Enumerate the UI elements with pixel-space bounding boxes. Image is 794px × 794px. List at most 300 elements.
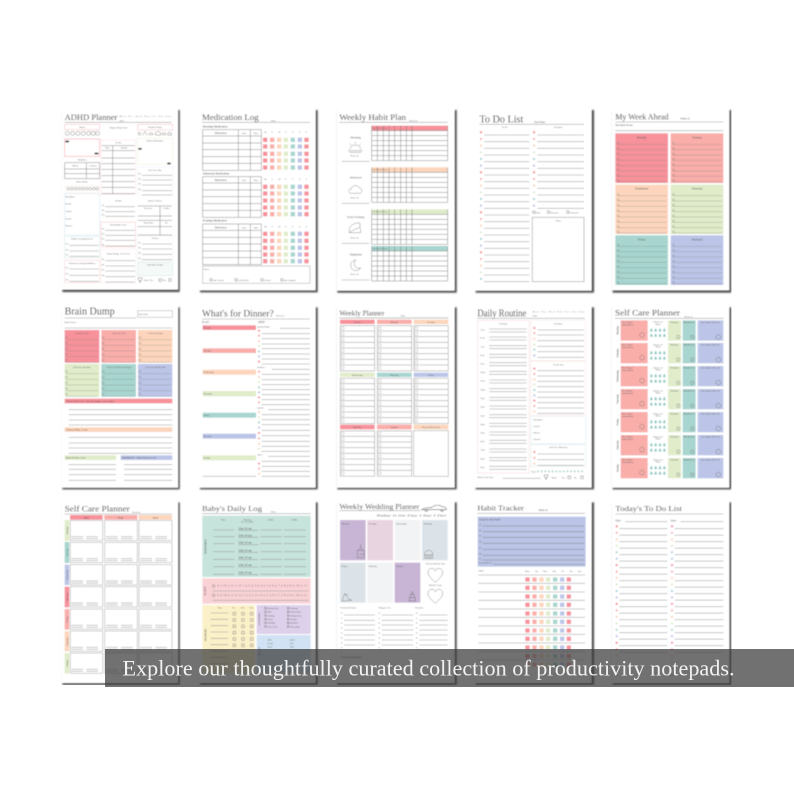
to do list bbox=[480, 131, 529, 282]
evening table: Medication bbox=[215, 226, 227, 229]
health block: weary bbox=[267, 642, 274, 645]
evening table: Evening Medication bbox=[203, 219, 227, 223]
Friday tile: Friday bbox=[638, 237, 646, 241]
priorities list: Priorities bbox=[415, 606, 424, 609]
self care moments bbox=[531, 445, 586, 466]
notes box bbox=[203, 266, 310, 283]
Sunday row: One thing I bbox=[622, 459, 633, 462]
panel: To Do List page: Priorities bbox=[554, 126, 563, 129]
self care plan: Self Care Plan bbox=[148, 169, 163, 172]
meals box: Dinner: bbox=[65, 225, 73, 228]
evening checks: T bbox=[285, 226, 287, 229]
diapers block: Time bbox=[218, 606, 222, 609]
call tile: I Need to Call bbox=[75, 332, 89, 335]
morning table: Time bbox=[254, 132, 258, 135]
schedule box: 7 pm bbox=[480, 449, 485, 452]
Tuesday tile: Tuesday bbox=[692, 136, 703, 140]
health block bbox=[257, 635, 311, 673]
Wednesday tile: Wednesday bbox=[396, 522, 408, 525]
to do box bbox=[531, 361, 586, 415]
panel: Daily Routine page bbox=[473, 305, 594, 489]
morning checks: T bbox=[285, 131, 287, 134]
morning table bbox=[203, 125, 261, 170]
Wednesday row: affirmations bbox=[622, 369, 633, 372]
Thursday tile: Thursday bbox=[691, 187, 703, 191]
Friday row: affirmations bbox=[622, 415, 633, 418]
self care moments: Self Care Moments bbox=[549, 446, 567, 449]
schedule box: 12pm bbox=[480, 388, 485, 391]
Friday row: Workout bbox=[670, 413, 679, 416]
title: What's for Dinner? bbox=[202, 309, 274, 319]
Thursday row: One thing I did well bbox=[701, 390, 720, 393]
activities block: screen free bbox=[267, 625, 277, 628]
fitness tracker: Steps Run bbox=[144, 222, 154, 225]
health list: 01. bbox=[102, 204, 105, 207]
water drops: H₂O bbox=[532, 470, 536, 473]
word of the day and rating bbox=[477, 475, 583, 480]
panel: Weekly Wedding Planner page bbox=[337, 500, 457, 685]
first row grids bbox=[340, 326, 448, 371]
habit grid morning: M T W T F S S bbox=[373, 127, 388, 130]
Tuesday row: Water bbox=[655, 346, 661, 349]
health block: calm bbox=[267, 638, 272, 641]
afternoon table: Dose bbox=[242, 179, 247, 182]
Monday tile: Monday bbox=[341, 522, 350, 525]
start date box: Start Date: bbox=[139, 313, 149, 316]
Friday row: Glasses of bbox=[653, 412, 663, 415]
activities block: pedialist bbox=[290, 622, 298, 625]
sleep block bbox=[202, 578, 311, 604]
notes box bbox=[532, 217, 584, 282]
schedule box: 5 pm bbox=[480, 432, 485, 435]
panel: Weekly Planner page bbox=[337, 305, 457, 489]
panel: Baby's Daily Log page: Date: bbox=[271, 511, 276, 514]
meals box: Snack: bbox=[65, 217, 72, 220]
activities block: reading bbox=[267, 614, 275, 617]
weekday row: Mon Tue Wed Thu Fri Sat Sun bbox=[119, 115, 172, 118]
title: Today's To Do List bbox=[615, 504, 682, 513]
day bars: Friday bbox=[203, 414, 210, 417]
title: Brain Dump bbox=[65, 306, 115, 318]
third row headers: Notes & Meal Prep bbox=[422, 426, 441, 429]
schedule box: 11am bbox=[480, 380, 485, 383]
fitness tracker: Fitness Tracker bbox=[148, 200, 162, 203]
feedings block: 20m 30 am bbox=[238, 541, 252, 545]
sleep block: 9 a 10 a 11 a 12 1 p 2 p 3 p 4 p 5 p 6 p 7 p 8 p 9 p 10 p 11 bbox=[217, 585, 307, 588]
Sunday row: One thing I did well bbox=[701, 459, 720, 462]
Sunday row: Water bbox=[655, 461, 661, 464]
habit grid morning bbox=[372, 126, 448, 161]
afternoon checks: W bbox=[278, 178, 281, 181]
first row headers: Monday bbox=[390, 321, 399, 324]
second row headers bbox=[340, 373, 448, 377]
Monday row: One thing I bbox=[622, 321, 633, 324]
feedings block: 20m 30 am bbox=[238, 526, 252, 530]
to do box: To Do List bbox=[553, 363, 564, 366]
schedule box: 9 am bbox=[480, 362, 485, 365]
Tuesday row: One thing I did well bbox=[701, 344, 720, 347]
activities block: sitting focus bbox=[290, 614, 302, 617]
morning table: Dose bbox=[242, 132, 247, 135]
main focus bbox=[615, 124, 723, 131]
fitness tracker: Cardio bbox=[163, 207, 170, 210]
panel: To Do List page: To Do bbox=[502, 126, 508, 129]
morning checks: W bbox=[278, 131, 281, 134]
afternoon checks: M bbox=[264, 178, 266, 181]
habit header: Wed bbox=[543, 570, 548, 573]
evening table: Dose bbox=[242, 226, 247, 229]
diapers block bbox=[202, 605, 255, 673]
third row headers: Sunday bbox=[391, 426, 399, 429]
panel: To Do List page bbox=[473, 107, 594, 293]
date left: Date: bbox=[615, 519, 621, 522]
health block: sad bbox=[290, 642, 294, 645]
nutrition table bbox=[65, 159, 100, 179]
priorities list bbox=[533, 131, 584, 208]
panel: Weekly Habit Plan page: Week of: bbox=[409, 119, 418, 122]
schedule box: Schedule bbox=[499, 322, 508, 325]
Tuesday row: Mindful Eat bbox=[683, 344, 695, 347]
call tile bbox=[65, 330, 99, 363]
date right: Date: bbox=[671, 519, 677, 522]
date left bbox=[615, 519, 667, 522]
schedule box: 2 pm bbox=[480, 406, 485, 409]
schedule box: 7 am bbox=[480, 345, 485, 348]
feedings block: Time bbox=[221, 518, 226, 521]
habit grid afternoon bbox=[372, 167, 448, 202]
meals box: Snacks: bbox=[533, 438, 541, 441]
Wednesday row: Glasses of bbox=[653, 366, 663, 369]
script tagline: Today is the Day I Say I Do! bbox=[376, 514, 447, 518]
priorities box bbox=[531, 320, 586, 361]
research section: I Want to Research, Look, Investigate, Learn About bbox=[66, 400, 114, 403]
diapers block: Dry bbox=[250, 606, 254, 609]
Friday row: Friday bbox=[617, 418, 620, 425]
panel: Self Care Planner weekly page bbox=[612, 305, 731, 489]
morning checks: S bbox=[299, 131, 301, 134]
daily affirmation: Daily Affirmation bbox=[147, 140, 164, 143]
activities block: bath bbox=[267, 611, 272, 614]
main focus bbox=[65, 321, 172, 328]
column headers: Spirit bbox=[153, 516, 158, 519]
status checkboxes bbox=[533, 211, 579, 215]
right list bbox=[671, 525, 723, 676]
Sunday row: Sunday bbox=[617, 463, 620, 472]
evening table bbox=[203, 219, 261, 265]
afternoon checks bbox=[263, 178, 309, 216]
Monday row bbox=[65, 520, 172, 541]
mood block bbox=[65, 124, 100, 135]
second row grids bbox=[340, 378, 448, 424]
day bars: Thursday bbox=[203, 393, 213, 396]
meals box: Lunch: bbox=[533, 425, 540, 428]
Thursday row: Glasses of bbox=[653, 389, 663, 392]
panel: Medication Log page bbox=[199, 107, 318, 292]
Sunday row bbox=[65, 653, 172, 673]
Tuesday row bbox=[617, 343, 723, 363]
Saturday row: Saturday bbox=[617, 440, 620, 450]
feedings block: FEEDINGS bbox=[203, 539, 207, 554]
shopping list: other: bbox=[257, 453, 263, 456]
water drops bbox=[532, 470, 583, 473]
morning checks: M bbox=[264, 131, 266, 134]
morning checks bbox=[263, 131, 309, 170]
Wednesday row bbox=[617, 366, 723, 386]
morning label and icon: Morning bbox=[350, 135, 361, 139]
remarkable notes list: 03. bbox=[102, 238, 105, 241]
schedule dump: Scheduler Dump bbox=[147, 264, 164, 267]
Friday tile bbox=[615, 235, 668, 285]
remarkable notes list: 01. bbox=[102, 228, 105, 231]
habit header: Sat bbox=[570, 570, 573, 573]
sleep block: 9 p 10 p 11 p 12 1 a 2 a 3 a 4 a 5 a 6 a 7 a 8 a 9 a 10 a 11 bbox=[217, 594, 307, 597]
feedings block bbox=[202, 516, 311, 577]
activities block: walking bbox=[267, 622, 276, 625]
Thursday tile bbox=[422, 520, 448, 560]
schedule box: 8 pm bbox=[480, 457, 485, 460]
nighttime label and icon: Done AL bbox=[350, 273, 360, 276]
Sunday row: Mindful Eat bbox=[683, 459, 695, 462]
Wednesday row: Wednesday bbox=[66, 569, 69, 580]
start date box bbox=[138, 311, 172, 317]
brain dump list: 02. bbox=[102, 263, 105, 266]
title: Daily Routine bbox=[477, 308, 527, 319]
Saturday tile bbox=[367, 563, 393, 603]
planner pages collection bbox=[61, 107, 731, 685]
feedings block: Nursing bbox=[244, 518, 252, 521]
panel: ADHD Planner page bbox=[61, 107, 180, 292]
panel: What's for Dinner page: SHOP bbox=[258, 321, 265, 324]
evening checks: W bbox=[278, 226, 281, 229]
Sunday tile: Sunday bbox=[396, 565, 404, 568]
grateful list: 01. bbox=[66, 243, 69, 246]
evening table: Time bbox=[254, 226, 258, 229]
Friday tile: Friday bbox=[341, 565, 348, 568]
email tile: I Need to Email bbox=[148, 332, 163, 335]
to dos: To Dos bbox=[152, 237, 158, 240]
Wednesday tile bbox=[395, 520, 420, 560]
Wednesday row: One thing I bbox=[622, 367, 633, 370]
feedings block: Solids bbox=[291, 518, 297, 521]
afternoon checks: T bbox=[285, 178, 287, 181]
Friday tile bbox=[340, 563, 366, 603]
brain dump list: Brain Dump - Get it out bbox=[107, 252, 130, 255]
countdown hearts: Weeks Until the Day bbox=[426, 563, 446, 566]
panel: My Week Ahead page: Week of: bbox=[680, 118, 690, 121]
habit grid evening bbox=[372, 209, 448, 244]
schedule tile: I Need to Schedule bbox=[73, 366, 91, 369]
goals box: 02 bbox=[479, 529, 482, 532]
title: To Do List bbox=[479, 114, 524, 125]
evening checks bbox=[263, 226, 309, 263]
habit header: Tue bbox=[535, 570, 538, 573]
feedings block: 20m 30 pm bbox=[238, 533, 253, 537]
rating row: Rate? Yes bbox=[144, 279, 153, 282]
schedule box: 9 pm bbox=[480, 466, 485, 469]
main focus: My Main Focus: bbox=[615, 124, 633, 127]
Monday tile bbox=[340, 520, 366, 560]
schedule tile bbox=[65, 364, 99, 397]
self care plan bbox=[138, 167, 173, 195]
self care plan: 02. bbox=[138, 177, 142, 180]
title: Self Care Planner bbox=[65, 505, 130, 514]
afternoon table: Time bbox=[254, 179, 258, 182]
Wednesday row: One thing I did well bbox=[701, 367, 720, 370]
to dos: 03. bbox=[138, 252, 142, 255]
habit header: Fri bbox=[561, 570, 564, 573]
activities block: sit play bbox=[290, 618, 298, 621]
shopping list: pantry/fridge: bbox=[257, 325, 270, 328]
Sunday row: Glasses of bbox=[653, 458, 663, 461]
Friday row bbox=[65, 609, 172, 630]
habit grid night bbox=[372, 246, 448, 281]
Monday row: affirmations bbox=[622, 323, 633, 326]
Friday row: One thing I bbox=[622, 413, 633, 416]
Thursday row: Mindful Eat bbox=[683, 390, 695, 393]
panel: Medication Log page: Date: bbox=[271, 119, 276, 122]
health list: 03. bbox=[102, 214, 105, 217]
Tuesday row bbox=[65, 542, 172, 563]
drive section: What I'll Drive to Do bbox=[66, 457, 86, 460]
activities block bbox=[257, 605, 311, 634]
Saturday row: One thing I did well bbox=[701, 436, 720, 439]
grateful list: 02. bbox=[66, 248, 69, 251]
self care plan: 04. bbox=[138, 188, 142, 191]
follow-through tile bbox=[101, 364, 136, 397]
notes box: Notes: bbox=[204, 268, 210, 271]
footer notes: Notes & Reminders bbox=[341, 656, 362, 659]
goals box bbox=[478, 517, 586, 567]
caption banner bbox=[105, 649, 794, 687]
Tuesday row: Workout bbox=[670, 344, 679, 347]
feedings block: 20m 30 am bbox=[238, 571, 252, 575]
to do table bbox=[101, 140, 136, 194]
title: Habit Tracker bbox=[477, 504, 524, 513]
speak tile: I Need to Speak with bbox=[146, 366, 166, 369]
Friday row: Water bbox=[655, 415, 661, 418]
to dos: 01. bbox=[138, 241, 142, 244]
sleep block: SLEEP bbox=[203, 586, 207, 595]
early evening label and icon bbox=[342, 215, 369, 243]
activities block: ACTIVITIES bbox=[258, 612, 261, 626]
title: ADHD Planner bbox=[65, 113, 118, 122]
column headers: Mind bbox=[84, 516, 90, 519]
left list bbox=[615, 525, 667, 676]
panel: Daily Routine page: Date: bbox=[533, 315, 538, 318]
brain dump list: 03. bbox=[102, 268, 105, 271]
health block: quiet bbox=[290, 638, 295, 641]
title: Medication Log bbox=[202, 112, 259, 122]
first row headers: Tuesday bbox=[427, 321, 436, 324]
habit rows bbox=[478, 575, 585, 667]
Saturday tile: Saturday bbox=[369, 565, 378, 568]
afternoon table: Afternoon Medication bbox=[203, 172, 230, 176]
remarkable notes list bbox=[101, 222, 136, 247]
Thursday tile bbox=[671, 185, 723, 234]
Tuesday row: One thing I bbox=[622, 344, 633, 347]
Monday row: Glasses of bbox=[653, 321, 663, 324]
main focus: Main Focus: bbox=[65, 321, 77, 324]
Monday row bbox=[617, 320, 723, 341]
afternoon table bbox=[203, 172, 261, 217]
diapers block: Pee bbox=[232, 606, 236, 609]
countdown hearts bbox=[426, 563, 446, 603]
fitness tracker: Exercise bbox=[144, 207, 152, 210]
goals box: Remember to: bbox=[479, 561, 493, 564]
column headers bbox=[70, 515, 172, 520]
grateful list: Today I am grateful for: bbox=[71, 238, 94, 241]
to dos: 04. bbox=[138, 257, 142, 260]
Wednesday row: Water bbox=[655, 369, 661, 372]
afternoon label and icon: Afternoon bbox=[350, 176, 362, 180]
Thursday tile: Thursday bbox=[423, 522, 433, 525]
water intake: Water Intake bbox=[76, 181, 88, 184]
word of the day and rating: No bbox=[574, 476, 578, 479]
Saturday row: Mindful Eat bbox=[683, 436, 695, 439]
word of the day and rating: Rate? bbox=[552, 476, 557, 479]
fitness tracker bbox=[138, 200, 172, 235]
Wednesday row bbox=[65, 565, 172, 585]
word of the day and rating: Word of the Day: bbox=[477, 476, 494, 479]
day bars: Tuesday bbox=[203, 350, 212, 353]
afternoon table: Medication bbox=[215, 179, 227, 182]
panel: Self Care Planner mind body spirit page bbox=[61, 500, 180, 685]
Thursday row: Thursday bbox=[66, 592, 69, 601]
Weekend tile bbox=[671, 235, 723, 285]
Thursday row: affirmations bbox=[622, 392, 633, 395]
title: Self Care Planner bbox=[615, 308, 680, 317]
Tuesday row: affirmations bbox=[622, 346, 633, 349]
goals box: 06 bbox=[479, 553, 482, 556]
evening checks: S bbox=[299, 226, 301, 229]
health list bbox=[102, 199, 135, 217]
panel: What's for Dinner page: PLAN bbox=[202, 321, 209, 324]
Monday row: One thing I did well bbox=[701, 321, 720, 324]
Monday row: Water bbox=[655, 323, 661, 326]
evening checks: S bbox=[306, 226, 308, 229]
feedings block: (L / R, mins) bbox=[241, 521, 254, 524]
schedule box: 1 pm bbox=[480, 397, 485, 400]
morning checks: T bbox=[271, 131, 273, 134]
to book list bbox=[340, 606, 375, 648]
feedings block: Bottle bbox=[268, 518, 274, 521]
Monday tile: Monday bbox=[637, 136, 647, 140]
word of the day and rating: Yes bbox=[562, 476, 565, 479]
status checkboxes: Delayed bbox=[550, 212, 559, 215]
afternoon checks: S bbox=[299, 178, 301, 181]
Saturday row: Glasses of bbox=[653, 435, 663, 438]
health list: Health bbox=[115, 199, 122, 202]
brain dump list: 04. bbox=[102, 274, 105, 277]
goals box: 07 bbox=[479, 557, 482, 560]
goals box: 05 bbox=[479, 547, 482, 550]
Thursday row bbox=[65, 587, 172, 607]
Saturday row: Water bbox=[655, 438, 661, 441]
meals box: Dinner: bbox=[533, 431, 541, 434]
activities block: sober play bbox=[290, 625, 300, 628]
weather bbox=[138, 124, 173, 135]
feedings block: 20m 30 am bbox=[238, 563, 252, 567]
nighttime label and icon: Nighttime bbox=[350, 252, 362, 256]
Saturday row: affirmations bbox=[622, 438, 633, 441]
Thursday row: Workout bbox=[670, 390, 679, 393]
second row headers: Wednesday bbox=[352, 374, 363, 377]
Wednesday row: Wednesday bbox=[617, 369, 620, 382]
meals box bbox=[65, 194, 100, 235]
shopping list: pantry: bbox=[257, 406, 264, 409]
health block: HEALTH bbox=[258, 647, 261, 656]
diapers block: Poo bbox=[241, 606, 245, 609]
